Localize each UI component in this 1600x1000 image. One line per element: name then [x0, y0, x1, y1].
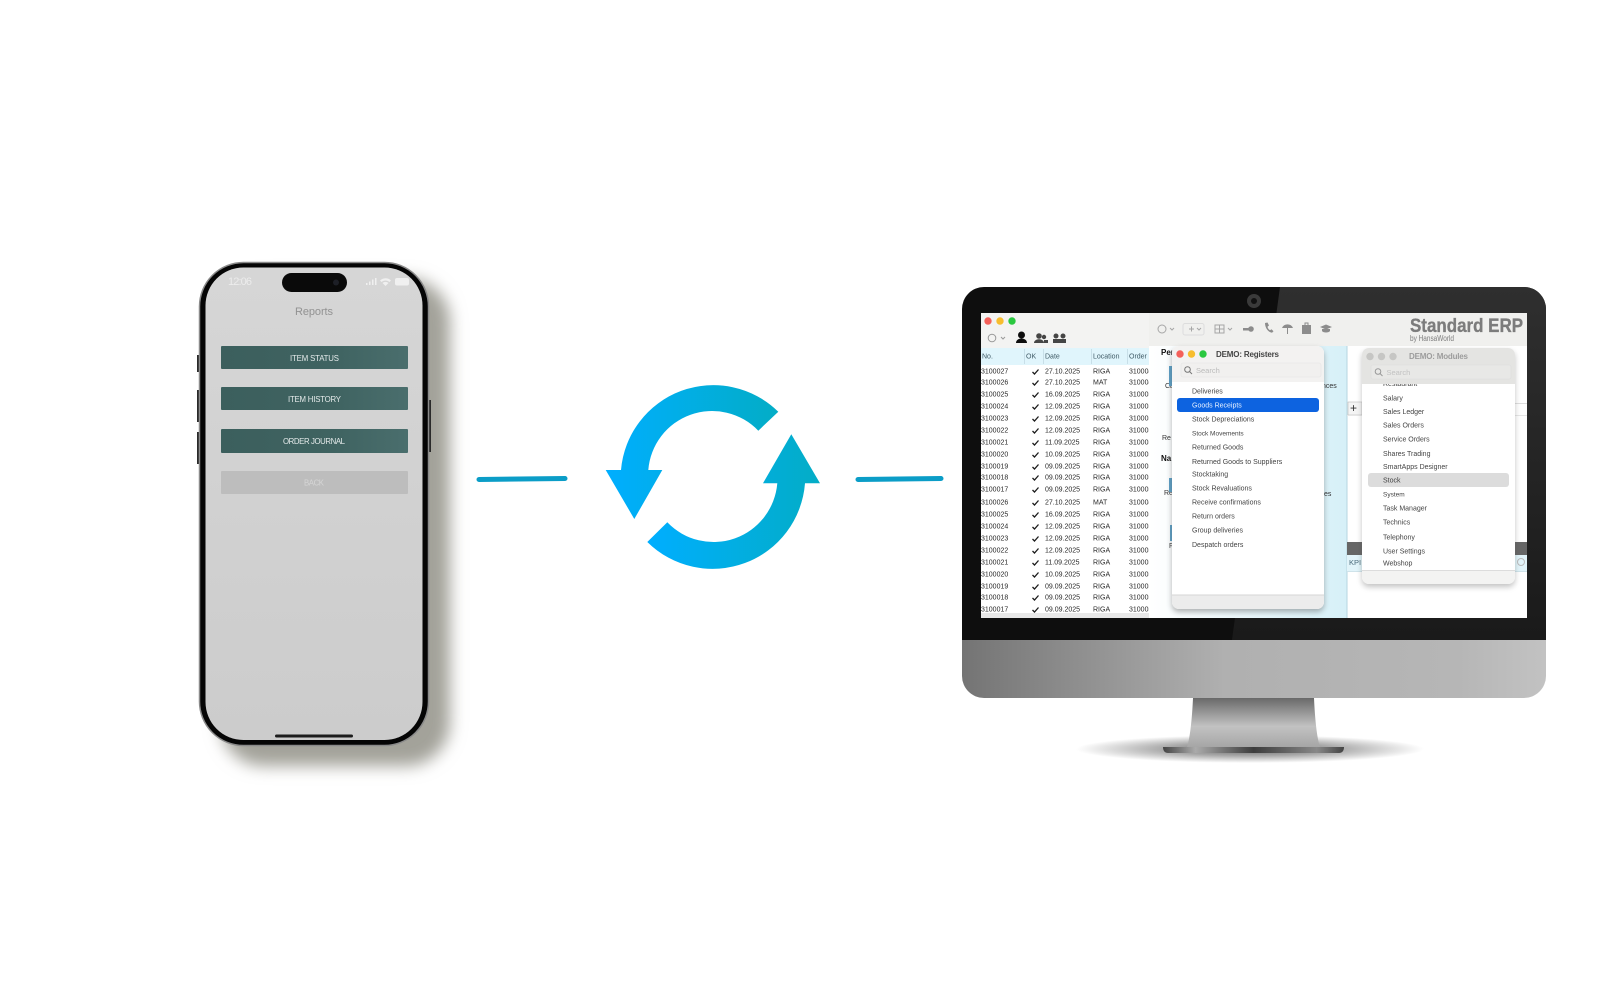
table rows: RIGA: [1093, 512, 1110, 518]
background labels: nces: [1322, 383, 1337, 390]
button: item status: ITEM STATUS: [290, 354, 339, 363]
background labels: es: [1324, 491, 1332, 498]
phone side buttons: [197, 355, 431, 464]
background labels: [1161, 348, 1337, 550]
table rows: 310003: [1129, 416, 1152, 422]
button: item history: ITEM HISTORY: [288, 395, 342, 404]
table rows: RIGA: [1093, 452, 1110, 458]
table rows: 310004: [1129, 368, 1152, 376]
table rows: RIGA: [1093, 464, 1110, 470]
registers list: Return orders: [1192, 514, 1235, 520]
table rows: 16.09.2025: [1045, 392, 1080, 398]
table rows: 310003: [1129, 536, 1152, 542]
home indicator: [275, 734, 353, 738]
table rows: 3100017: [981, 606, 1008, 614]
registers list: Receive confirmations: [1192, 500, 1261, 506]
registers window controls: [1176, 350, 1207, 358]
modules window title: DEMO: Modules: [1409, 352, 1469, 361]
sync icon: [606, 385, 820, 569]
modules search: Search: [1386, 368, 1410, 377]
monitor: [962, 287, 1546, 763]
bezel glare: [1232, 287, 1546, 640]
table rows: 3100018: [981, 594, 1008, 602]
table rows: 3100026: [981, 380, 1008, 386]
stock highlight: [1368, 473, 1509, 487]
registers list: Stocktaking: [1192, 472, 1228, 478]
registers search: Search: [1196, 366, 1220, 375]
dynamic island: [282, 273, 347, 292]
table rows: [981, 368, 1152, 614]
status bar time: 12:06: [228, 276, 252, 288]
table rows: 3100018: [981, 474, 1008, 482]
button: back: BACK: [304, 478, 325, 488]
left table window: [981, 313, 1152, 618]
table rows: 11.09.2025: [1045, 440, 1080, 446]
registers list: Deliveries: [1192, 388, 1223, 396]
modules list: Sales Ledger: [1383, 409, 1425, 416]
table rows: 3100022: [981, 428, 1008, 434]
table rows: 3100020: [981, 572, 1008, 578]
monitor chin: [962, 640, 1546, 698]
table rows: 12.09.2025: [1045, 548, 1080, 554]
stand: [1187, 698, 1320, 747]
table rows: 3100027: [981, 368, 1008, 376]
table rows: RIGA: [1093, 486, 1110, 494]
modules list: Shares Trading: [1383, 451, 1431, 458]
background labels: Ca: [1165, 383, 1174, 390]
registers list: Stock Depreciations: [1192, 416, 1255, 424]
monitor bezel: [962, 287, 1546, 640]
table rows: 3100021: [981, 560, 1008, 566]
phone: [197, 262, 450, 766]
table rows: 310003: [1129, 584, 1152, 590]
modules list: SmartApps Designer: [1383, 464, 1448, 471]
status bar icons: [366, 278, 409, 286]
table rows: RIGA: [1093, 416, 1110, 422]
registers window title: DEMO: Registers: [1216, 350, 1280, 359]
registers list: [1192, 388, 1283, 549]
table rows: 3100022: [981, 548, 1008, 554]
user toolbar icons: [988, 332, 1066, 343]
middle background: [1188, 346, 1346, 618]
table rows: 310003: [1129, 474, 1152, 482]
sync arrow bottom: [647, 434, 820, 569]
registers window: [1172, 346, 1324, 612]
table rows: RIGA: [1093, 404, 1110, 410]
table rows: 310003: [1129, 560, 1152, 566]
table rows: RIGA: [1093, 548, 1110, 554]
table rows: 09.09.2025: [1045, 584, 1080, 590]
button: order journal: [221, 429, 408, 453]
registers search: [1181, 363, 1321, 377]
table rows: RIGA: [1093, 440, 1110, 446]
table header: [981, 348, 1149, 365]
registers list: Goods Receipts: [1192, 402, 1242, 410]
registers list: Returned Goods to Suppliers: [1192, 459, 1283, 466]
modules list: Salary: [1383, 396, 1403, 402]
table rows: 3100019: [981, 584, 1008, 590]
button: back: [221, 471, 408, 494]
table rows: 12.09.2025: [1045, 536, 1080, 542]
table rows: 3100023: [981, 416, 1008, 422]
modules list: Technics: [1383, 520, 1411, 526]
table rows: 27.10.2025: [1045, 368, 1080, 376]
table rows: 310003: [1129, 440, 1152, 446]
table rows: RIGA: [1093, 474, 1110, 482]
table rows: 09.09.2025: [1045, 486, 1080, 494]
registers list: Stock Movements: [1192, 430, 1244, 438]
floor shadow: [1076, 735, 1424, 763]
table scrollbar: [981, 613, 1149, 618]
phone screen: [206, 268, 422, 740]
modules list: User Settings: [1383, 548, 1426, 556]
phone drop shadow: [220, 278, 450, 766]
table rows: 310003: [1129, 464, 1152, 470]
modules window: [1362, 348, 1515, 587]
table header: OK: [1026, 354, 1036, 360]
table rows: 09.09.2025: [1045, 464, 1080, 470]
background labels: Re: [1164, 490, 1173, 497]
table rows: 3100020: [981, 452, 1008, 458]
table rows: MAT: [1093, 380, 1108, 386]
stand base: [1163, 747, 1344, 753]
table rows: 310003: [1129, 404, 1152, 410]
table rows: 310003: [1129, 594, 1152, 602]
button: order journal: ORDER JOURNAL: [283, 437, 346, 446]
right pane behind windows: [1347, 401, 1527, 572]
table header: Date: [1045, 354, 1060, 360]
main toolbar: [1149, 313, 1527, 346]
table rows: 310003: [1129, 428, 1152, 434]
modules list: [1383, 381, 1448, 568]
background labels: Re: [1162, 435, 1171, 442]
table rows: 16.09.2025: [1045, 512, 1080, 518]
table rows: 310003: [1129, 606, 1152, 614]
modules list: Telephony: [1383, 534, 1415, 542]
phone body: [200, 262, 428, 746]
registers list: Despatch orders: [1192, 542, 1244, 549]
table rows: RIGA: [1093, 536, 1110, 542]
goods receipts highlight: [1177, 398, 1319, 412]
table rows: 09.09.2025: [1045, 474, 1080, 482]
table rows: 3100026: [981, 500, 1008, 506]
logo: Standard ERP: by HansaWorld: [1410, 334, 1454, 343]
modules search: [1374, 368, 1410, 376]
table rows: 27.10.2025: [1045, 500, 1080, 506]
table header: No.: [982, 354, 993, 360]
table rows: 3100024: [981, 524, 1008, 530]
modules list: System: [1383, 492, 1405, 498]
modules list: Service Orders: [1383, 436, 1430, 444]
background labels: F: [1169, 543, 1173, 550]
table rows: RIGA: [1093, 428, 1110, 434]
modules list: Sales Orders: [1383, 422, 1424, 430]
window controls: [984, 317, 1016, 325]
table rows: 310003: [1129, 486, 1152, 494]
row check marks: [1032, 370, 1038, 612]
table rows: 3100025: [981, 392, 1008, 398]
table rows: 27.10.2025: [1045, 380, 1080, 386]
table rows: 12.09.2025: [1045, 428, 1080, 434]
registers list: Group deliveries: [1192, 528, 1243, 534]
table rows: 310004: [1129, 500, 1152, 506]
button: item status: [221, 346, 408, 369]
table rows: 12.09.2025: [1045, 416, 1080, 422]
table rows: MAT: [1093, 500, 1108, 506]
background labels: Na: [1161, 454, 1172, 463]
table rows: 310003: [1129, 572, 1152, 578]
table header: Order: [1129, 354, 1148, 360]
table rows: 3100021: [981, 440, 1008, 446]
table rows: 310003: [1129, 392, 1152, 398]
table rows: 12.09.2025: [1045, 404, 1080, 410]
table rows: RIGA: [1093, 606, 1110, 614]
table rows: 310003: [1129, 452, 1152, 458]
table rows: 310003: [1129, 512, 1152, 518]
table rows: RIGA: [1093, 368, 1110, 376]
monitor screen: [981, 313, 1527, 618]
modules list: Stock: [1383, 478, 1401, 484]
table rows: 3100025: [981, 512, 1008, 518]
table rows: 310003: [1129, 548, 1152, 554]
table rows: RIGA: [1093, 560, 1110, 566]
table rows: RIGA: [1093, 392, 1110, 398]
sync arrow top: [606, 385, 778, 519]
table rows: 10.09.2025: [1045, 452, 1080, 458]
registers list: Returned Goods: [1192, 444, 1244, 452]
table rows: 12.09.2025: [1045, 524, 1080, 530]
modules list: Webshop: [1383, 560, 1413, 568]
table rows: 3100023: [981, 536, 1008, 542]
table rows: 310004: [1129, 380, 1152, 386]
table rows: 3100024: [981, 404, 1008, 410]
table rows: 3100019: [981, 464, 1008, 470]
button: item history: [221, 387, 408, 410]
table rows: 09.09.2025: [1045, 594, 1080, 602]
table rows: 3100017: [981, 486, 1008, 494]
registers list: Stock Revaluations: [1192, 486, 1252, 492]
screen title: Reports: [295, 306, 334, 318]
table header: Location: [1093, 354, 1120, 360]
webcam: [1247, 294, 1261, 308]
logo: Standard ERP: [1410, 318, 1523, 342]
table rows: 11.09.2025: [1045, 560, 1080, 566]
table rows: 310003: [1129, 524, 1152, 530]
right pane behind windows: +: [1350, 401, 1357, 415]
logo: Standard ERP: Standard ERP: [1410, 315, 1523, 337]
connector line left: [479, 478, 565, 480]
modules list: Task Manager: [1383, 506, 1428, 512]
table rows: RIGA: [1093, 594, 1110, 602]
table rows: RIGA: [1093, 572, 1110, 578]
right pane behind windows: KPI: [1349, 558, 1361, 567]
table rows: RIGA: [1093, 524, 1110, 530]
table rows: RIGA: [1093, 584, 1110, 590]
connector line right: [858, 478, 941, 480]
background labels: Per: [1161, 348, 1174, 357]
table rows: 09.09.2025: [1045, 606, 1080, 614]
modules window controls: [1366, 353, 1397, 360]
table rows: 10.09.2025: [1045, 572, 1080, 578]
modules list: Restaurant: [1383, 381, 1417, 388]
